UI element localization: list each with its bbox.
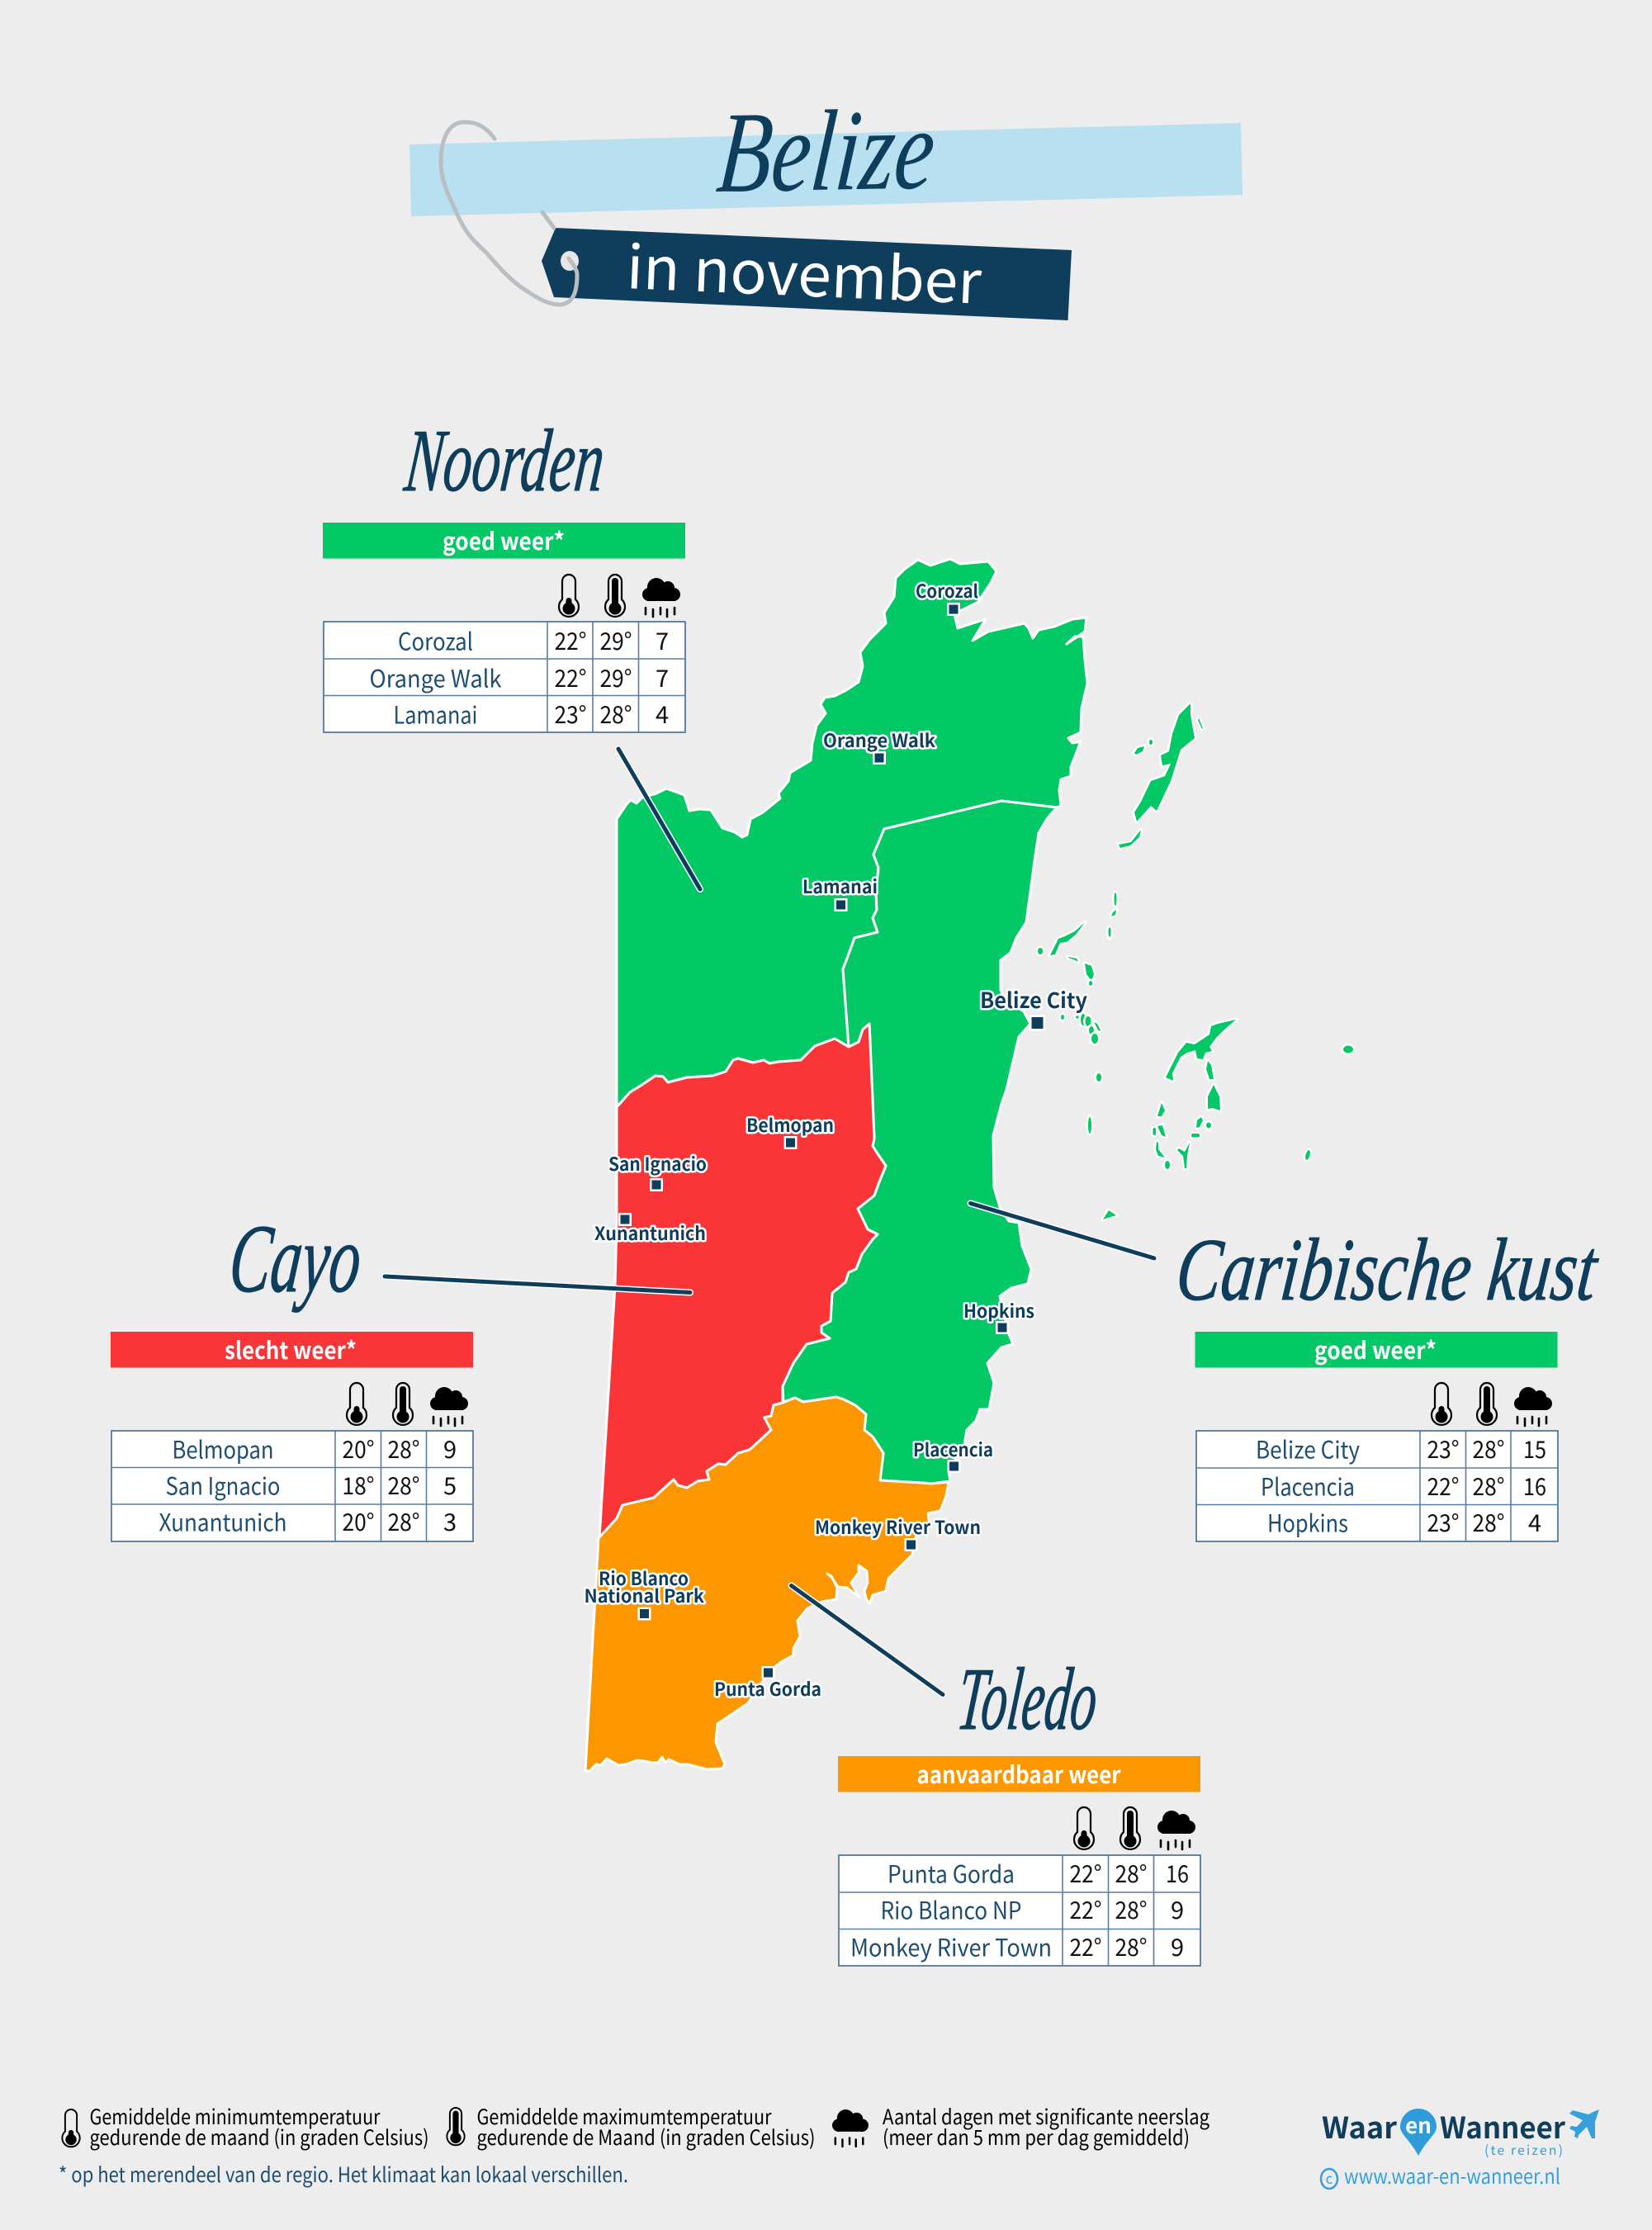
weather table: 4 bbox=[656, 696, 669, 731]
weather table: 23° bbox=[1427, 1504, 1460, 1539]
islands bbox=[1038, 703, 1353, 1219]
weather table: 28° bbox=[1473, 1431, 1504, 1465]
icon: minimum temperature bbox=[1432, 1383, 1451, 1425]
weather table: 29° bbox=[599, 623, 632, 657]
legend: maximum temperature: Gemiddelde maximumtemperatuur bbox=[477, 2101, 772, 2131]
weather table: 23° bbox=[555, 696, 586, 731]
weather table: 9 bbox=[1171, 1929, 1184, 1963]
callout line: Noorden bbox=[618, 749, 700, 889]
weather table: 22° bbox=[1427, 1468, 1460, 1503]
website: www.waar-en-wanneer.nl bbox=[1344, 2161, 1560, 2190]
weather table: 22° bbox=[555, 660, 586, 694]
logo word: Wanneer: Wanneer bbox=[1440, 2105, 1565, 2147]
weather table bbox=[111, 1431, 473, 1541]
weather table: Xunantunich bbox=[159, 1504, 287, 1539]
city: Lamanai: Lamanai bbox=[802, 873, 878, 899]
title block bbox=[409, 86, 1243, 321]
callout line: Caribische kust bbox=[971, 1204, 1154, 1258]
weather table: Monkey River Town bbox=[850, 1929, 1052, 1963]
weather table: 23° bbox=[1427, 1431, 1460, 1465]
region: Caribische kust bbox=[783, 801, 1057, 1484]
weather table: 29° bbox=[599, 660, 632, 694]
weather table: 22° bbox=[1070, 1929, 1101, 1963]
title: Belize: Belize bbox=[712, 86, 940, 217]
icon: maximum temperature bbox=[1477, 1383, 1497, 1425]
weather table bbox=[1196, 1431, 1558, 1541]
weather table: Belmopan bbox=[172, 1432, 274, 1466]
legend: minimum temperature: Gemiddelde minimumtemperatuur bbox=[89, 2101, 381, 2131]
city: Corozal bbox=[916, 577, 978, 614]
weather table: Rio Blanco NP bbox=[880, 1892, 1022, 1927]
title banner bbox=[409, 123, 1243, 216]
tag hole bbox=[561, 251, 579, 271]
city: Hopkins: Hopkins bbox=[963, 1297, 1034, 1323]
icon: maximum temperature bbox=[1120, 1807, 1140, 1849]
callout line: Toledo bbox=[791, 1585, 943, 1694]
panel: Noorden bbox=[323, 412, 685, 732]
status bar: goed weer bbox=[1195, 1332, 1557, 1367]
weather table: 28° bbox=[1473, 1468, 1504, 1503]
status bar: goed weer bbox=[323, 523, 685, 558]
city: San Ignacio: San Ignacio bbox=[608, 1150, 707, 1177]
city: Belmopan: Belmopan bbox=[746, 1111, 834, 1138]
heading: Cayo: Cayo bbox=[225, 1205, 367, 1313]
weather table bbox=[839, 1855, 1200, 1966]
icon: rainy days bbox=[1157, 1811, 1195, 1849]
weather table: Lamanai bbox=[393, 697, 477, 731]
logo tagline: (te reizen) bbox=[1484, 2139, 1565, 2159]
luggage tag bbox=[542, 228, 1072, 320]
weather table: 28° bbox=[388, 1431, 419, 1465]
weather table: 18° bbox=[342, 1467, 375, 1502]
status bar: goed weer: goed weer* bbox=[1314, 1332, 1437, 1366]
weather table: Belize City bbox=[1256, 1432, 1360, 1466]
weather table bbox=[324, 622, 685, 732]
city: San Ignacio bbox=[608, 1150, 707, 1189]
weather table: 28° bbox=[1473, 1504, 1504, 1539]
legend: rainy days: Aantal dagen met significante neerslag bbox=[883, 2101, 1209, 2131]
city: Xunantunich: Xunantunich bbox=[594, 1219, 706, 1246]
weather table: 7 bbox=[656, 623, 669, 657]
legend: minimum temperature: gedurende de maand (in graden Celsius) bbox=[89, 2122, 429, 2152]
weather table: 9 bbox=[1171, 1891, 1184, 1926]
weather table: San Ignacio bbox=[165, 1468, 281, 1503]
weather table: 20° bbox=[342, 1431, 375, 1465]
tag string bbox=[441, 122, 577, 305]
status bar: goed weer: goed weer* bbox=[443, 523, 565, 557]
weather table: 28° bbox=[1115, 1929, 1148, 1963]
heading: Noorden: Noorden bbox=[400, 412, 609, 510]
icon: minimum temperature bbox=[1074, 1807, 1094, 1849]
legend: rainy days: (meer dan 5 mm per dag gemiddeld) bbox=[883, 2122, 1190, 2152]
icon: maximum temperature bbox=[393, 1383, 413, 1425]
legend: minimum temperature bbox=[62, 2101, 428, 2152]
weather table: 28° bbox=[1115, 1891, 1148, 1926]
city: Punta Gorda: Punta Gorda bbox=[714, 1675, 821, 1702]
city: Rio Blanco National Park: National Park bbox=[585, 1582, 705, 1608]
region: Toledo bbox=[585, 1397, 949, 1771]
subtitle: in november: in november bbox=[625, 219, 984, 321]
city: Rio Blanco National Park: Rio Blanco bbox=[599, 1565, 689, 1591]
copyright icon bbox=[1321, 2167, 1337, 2189]
copyright icon: c bbox=[1326, 2167, 1333, 2188]
logo word: Waar: Waar bbox=[1322, 2105, 1397, 2147]
weather table: Corozal bbox=[398, 623, 473, 657]
city: Belize City: Belize City bbox=[980, 984, 1087, 1015]
weather table: 3 bbox=[443, 1503, 457, 1538]
weather table: 15 bbox=[1523, 1431, 1546, 1465]
weather table: 22° bbox=[1070, 1855, 1101, 1890]
weather table: 16 bbox=[1523, 1468, 1546, 1503]
region: Noorden bbox=[617, 559, 1087, 1107]
weather table: 16 bbox=[1166, 1855, 1189, 1890]
city: Placencia: Placencia bbox=[913, 1436, 993, 1462]
weather table: 5 bbox=[443, 1467, 457, 1502]
logo pin bbox=[1400, 2109, 1437, 2156]
status bar: aanvaardbaar weer bbox=[838, 1756, 1200, 1792]
weather table: 28° bbox=[388, 1503, 419, 1538]
heading: Toledo: Toledo bbox=[953, 1650, 1102, 1749]
city: Corozal: Corozal bbox=[916, 577, 978, 604]
weather table: 28° bbox=[1115, 1855, 1148, 1890]
panel: Caribische kust bbox=[1172, 1221, 1603, 1541]
city labels and markers bbox=[585, 577, 1087, 1702]
weather table: 22° bbox=[555, 623, 586, 657]
icon: rainy days bbox=[642, 578, 680, 617]
icon: minimum temperature bbox=[347, 1383, 367, 1425]
city: Monkey River Town: Monkey River Town bbox=[815, 1513, 981, 1540]
legend: rainy days bbox=[832, 2101, 1209, 2152]
weather table: 4 bbox=[1528, 1504, 1541, 1539]
legend: maximum temperature bbox=[447, 2101, 816, 2152]
city: Rio Blanco National Park bbox=[585, 1565, 705, 1618]
legend bbox=[59, 2101, 1209, 2189]
icon: minimum temperature bbox=[559, 575, 579, 617]
weather table: 28° bbox=[388, 1467, 419, 1502]
weather table: 28° bbox=[599, 696, 632, 731]
weather table: Orange Walk bbox=[370, 660, 502, 695]
status bar: slecht weer bbox=[111, 1332, 473, 1367]
footnote: * op het merendeel van de regio. Het klimaat kan lokaal verschillen. bbox=[59, 2159, 628, 2189]
region: Cayo bbox=[599, 1024, 886, 1538]
weather table: 22° bbox=[1070, 1891, 1101, 1926]
callout line: Cayo bbox=[385, 1276, 690, 1293]
status bar: slecht weer: slecht weer* bbox=[225, 1332, 357, 1366]
panel: Cayo bbox=[111, 1205, 473, 1541]
icon: rainy days bbox=[1514, 1387, 1552, 1426]
city: Belize City bbox=[980, 984, 1087, 1029]
map of Belize bbox=[585, 559, 1353, 1771]
city: Orange Walk: Orange Walk bbox=[823, 727, 936, 753]
legend: maximum temperature: gedurende de Maand (in graden Celsius) bbox=[477, 2122, 816, 2152]
weather table: Hopkins bbox=[1267, 1504, 1348, 1539]
status bar: aanvaardbaar weer: aanvaardbaar weer bbox=[916, 1756, 1121, 1791]
weather table: Punta Gorda bbox=[888, 1856, 1015, 1891]
weather table: 20° bbox=[342, 1503, 375, 1538]
weather table: 9 bbox=[443, 1431, 457, 1465]
logo: Waar en Wanneer bbox=[1321, 2105, 1599, 2190]
logo pin: en bbox=[1405, 2109, 1432, 2140]
icon: maximum temperature bbox=[605, 575, 625, 617]
icon: rainy days bbox=[430, 1387, 468, 1426]
panel: Toledo bbox=[838, 1650, 1200, 1966]
icon: plane bbox=[1569, 2109, 1599, 2138]
weather table: 7 bbox=[656, 660, 669, 694]
weather table: Placencia bbox=[1261, 1468, 1355, 1503]
